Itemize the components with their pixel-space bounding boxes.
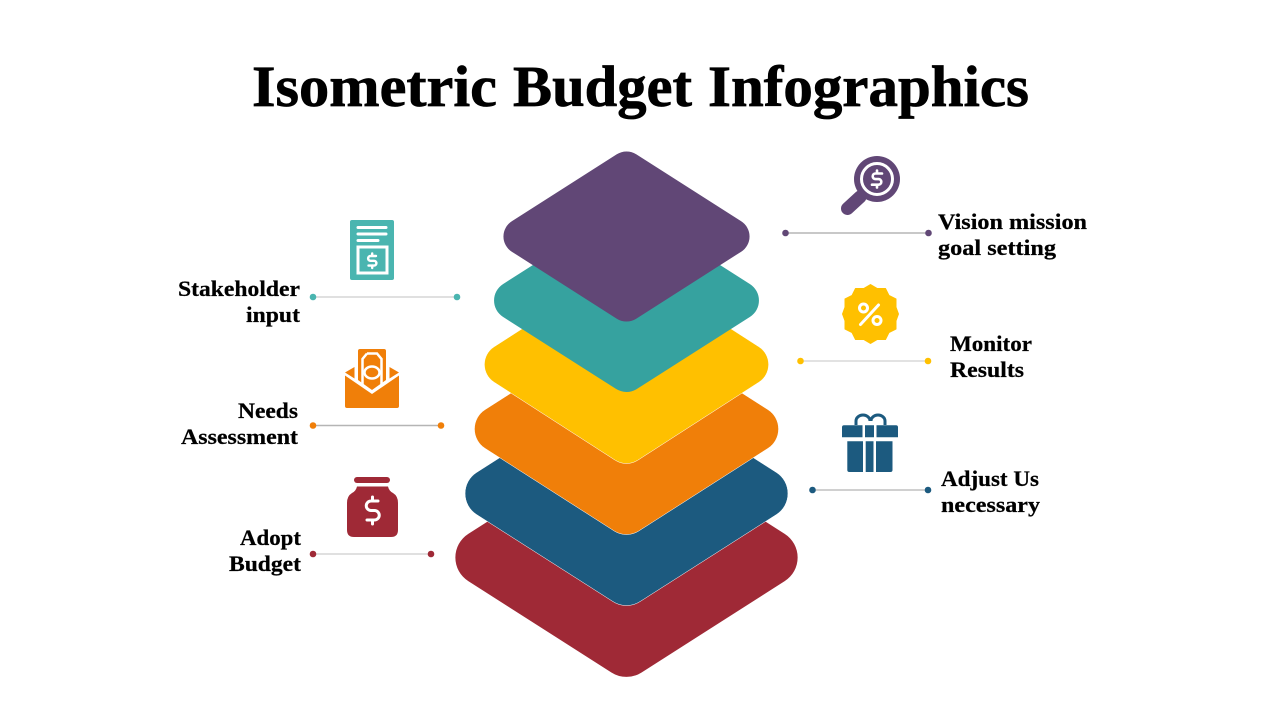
label: Adopt Budget: Adopt [240, 525, 302, 550]
label: Needs Assessment: Assessment [181, 424, 299, 449]
icon: gift box [842, 415, 898, 472]
label: Adopt Budget: Budget [229, 551, 302, 576]
label: Adjust Us necessary: necessary [941, 492, 1040, 517]
label: Stakeholder input: Stakeholder [178, 276, 300, 301]
icon: percent badge [842, 284, 898, 344]
title: Isometric [252, 54, 497, 119]
label: Adopt Budget [229, 525, 302, 576]
label: Vision mission goal setting: goal setting [938, 235, 1056, 260]
layer: blue [465, 381, 788, 606]
label: Adjust Us necessary: Adjust Us [941, 466, 1039, 491]
label: Needs Assessment: Needs [238, 398, 298, 423]
layer: teal [494, 209, 759, 392]
connector: Vision mission [782, 230, 932, 236]
label: Monitor Results [950, 331, 1032, 382]
layer: purple [503, 151, 750, 322]
icon: document with dollar [350, 220, 394, 280]
label: Stakeholder input [178, 276, 301, 327]
label: Adjust Us necessary [941, 466, 1040, 517]
label: Stakeholder input: input [246, 302, 301, 327]
connector: Stakeholder [310, 294, 460, 300]
label: Vision mission goal setting: Vision mission [938, 209, 1087, 234]
title: Budget [513, 54, 693, 119]
icon: money jar [347, 477, 398, 537]
layer: red [455, 438, 798, 677]
connector: Adopt Budget [310, 551, 434, 557]
icon: envelope with banknote [345, 349, 399, 408]
label: Monitor Results: Monitor [950, 331, 1032, 356]
label: Vision mission goal setting [938, 209, 1087, 260]
label: Monitor Results: Results [950, 357, 1024, 382]
icon: magnifier with dollar [848, 156, 900, 208]
title: Infographics [708, 54, 1029, 119]
isometric layer stack [455, 151, 798, 677]
layer: yellow [484, 266, 769, 463]
connector: Adjust Us [809, 487, 931, 493]
title [252, 54, 1029, 119]
layer: orange [474, 323, 779, 535]
connector: Monitor Results [797, 358, 931, 364]
connector: Needs Assessment [310, 422, 444, 429]
label: Needs Assessment [181, 398, 299, 449]
